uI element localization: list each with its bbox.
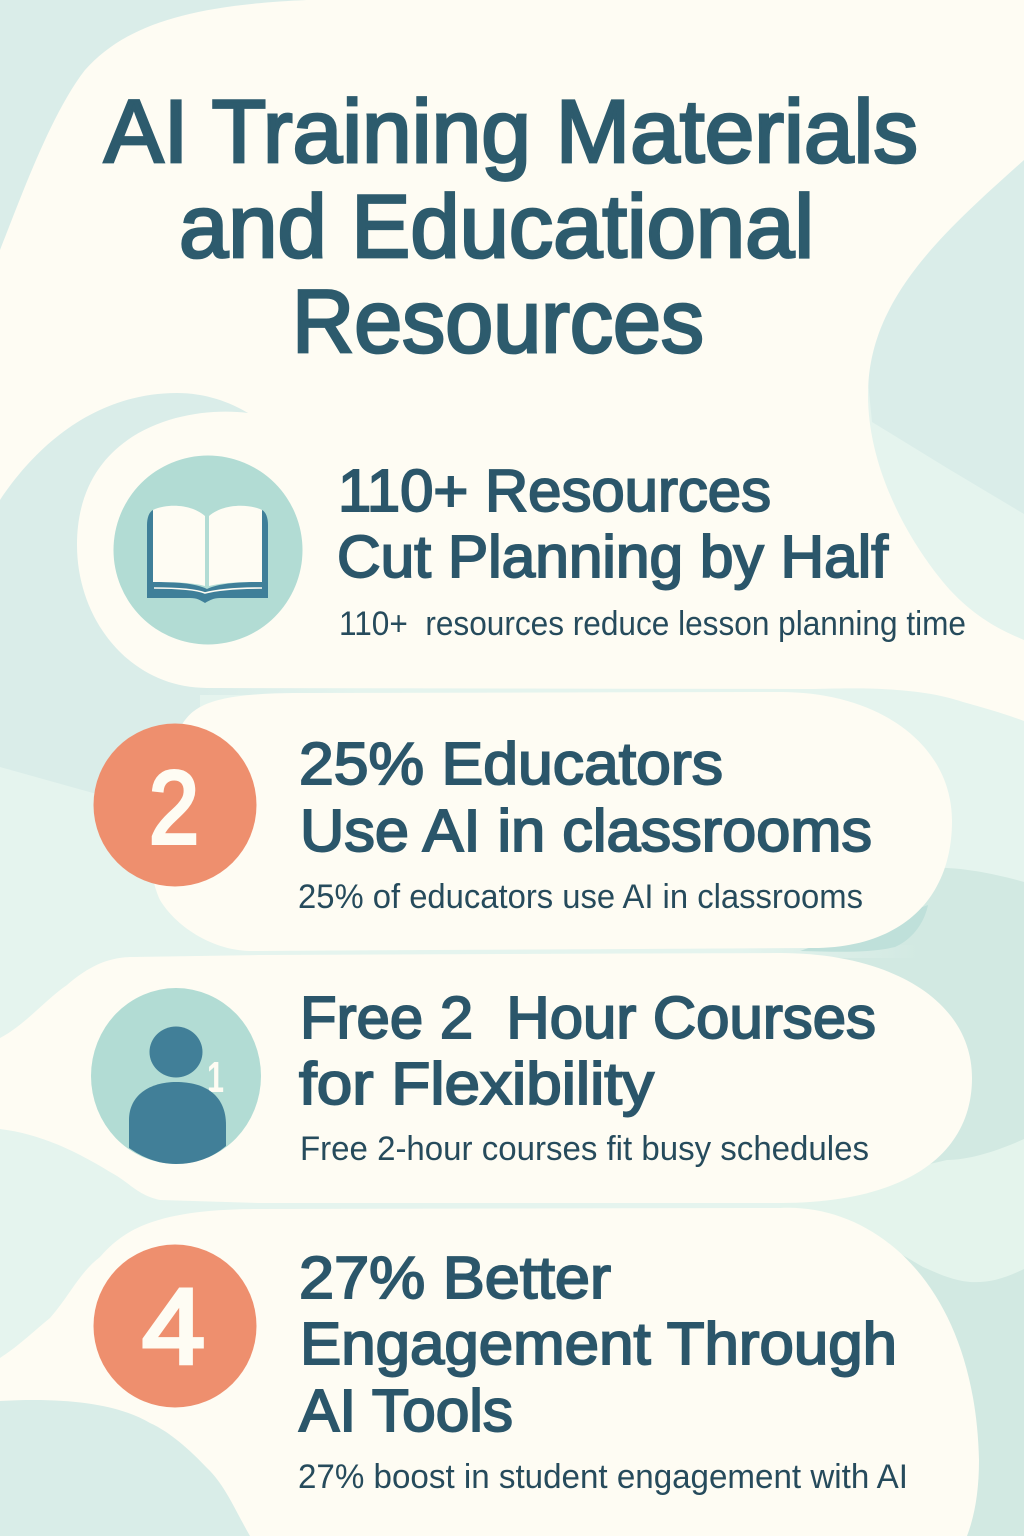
panel: header area and card 1 backdrop [0, 0, 1024, 721]
card 2 heading [299, 731, 872, 864]
card 3 description: Free 2-hour courses fit busy schedules [300, 1130, 869, 1168]
card 2 backdrop [149, 692, 952, 951]
card 3 backdrop [0, 953, 972, 1203]
card 1 description: 110+ resources reduce lesson planning time [339, 605, 966, 643]
badge: number 2: 2 [149, 750, 199, 865]
panel: 25% educators [94, 692, 952, 951]
panel: free 2 hour courses [0, 953, 972, 1203]
card 2 heading: 25% Educators [299, 731, 723, 797]
card 3 heading: for Flexibility [299, 1051, 655, 1117]
card 4 heading: 27% Better [299, 1245, 611, 1311]
card 3 heading [299, 985, 876, 1117]
title: Resources [292, 271, 704, 371]
title: AI Training Materials [104, 81, 918, 181]
title [104, 81, 918, 371]
card 3 heading: Free 2 Hour Courses [300, 985, 876, 1051]
badge: number 4: 4 [142, 1266, 205, 1386]
card 1 heading: 110+ Resources [338, 458, 771, 524]
card 4 description: 27% boost in student engagement with AI [298, 1458, 908, 1496]
panel: 27% better engagement [0, 1208, 979, 1536]
icon: person: 1 [207, 1053, 224, 1102]
card 2 heading: Use AI in classrooms [300, 798, 872, 864]
card 1 heading [337, 458, 889, 590]
icon: open book [114, 456, 302, 644]
panel: 110+ resources [114, 456, 966, 644]
card 2 description: 25% of educators use AI in classrooms [298, 878, 863, 916]
card 4 heading [299, 1245, 897, 1444]
card 4 backdrop [0, 1208, 979, 1536]
icon: person [91, 988, 261, 1164]
card 4 heading: AI Tools [299, 1378, 513, 1444]
badge: number 4 [94, 1244, 256, 1408]
badge: number 2 [94, 724, 256, 886]
title: and Educational [179, 176, 814, 276]
card 4 heading: Engagement Through [300, 1311, 897, 1377]
card 1 heading: Cut Planning by Half [337, 524, 889, 590]
